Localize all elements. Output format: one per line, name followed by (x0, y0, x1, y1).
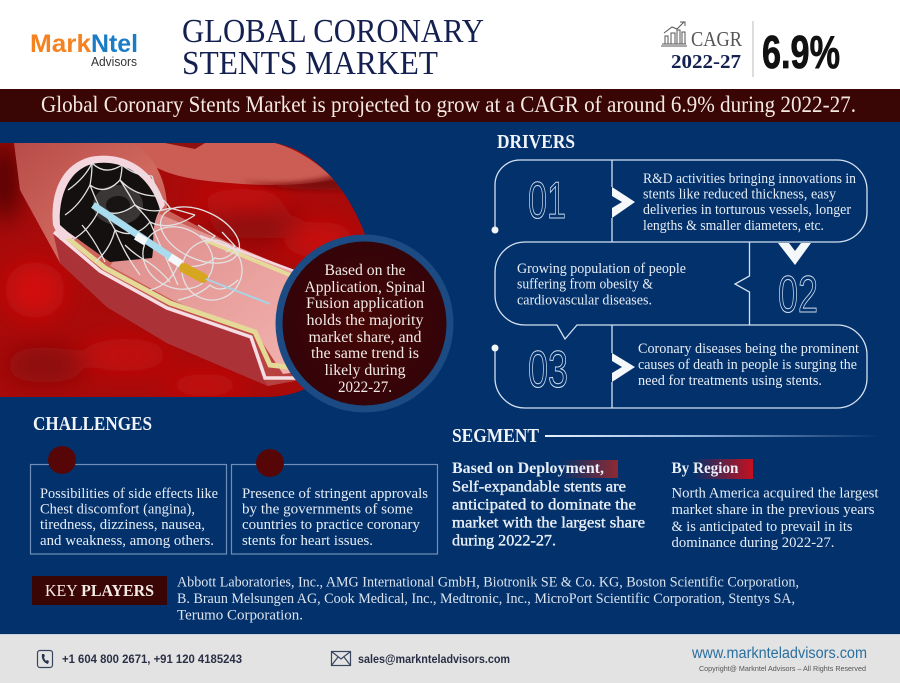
CAGR label: 2022-27 (671, 51, 741, 73)
segment: region: & is anticipated to prevail in its (672, 519, 853, 535)
callout: application share: likely during (324, 362, 406, 379)
driver 02: suffering from obesity & (517, 276, 654, 292)
driver 02: Growing population of people (517, 261, 686, 277)
heading: challenges: CHALLENGES (33, 414, 152, 435)
key players list: Abbott Laboratories, Inc., AMG International GmbH, Biotronik SE & Co. KG, Boston Scientific Corporation, (177, 574, 799, 590)
callout: application share: holds the majority (306, 312, 424, 329)
driver 03: 03 (528, 341, 568, 399)
segment: region: By Region (672, 460, 739, 477)
callout: application share: Based on the (324, 262, 406, 279)
segment: region: market share in the previous years (672, 502, 875, 518)
panel: challenge 1: tiredness, dizziness, nausea, (40, 517, 205, 533)
segment: deployment: during 2022-27. (452, 532, 556, 550)
panel: challenge 1: and weakness, among others. (40, 533, 214, 549)
driver 01 (528, 171, 857, 234)
key players badge: KEY PLAYERS (45, 581, 154, 600)
phone numbers: +1 604 800 2671, +91 120 4185243 (62, 654, 242, 666)
logo: Mark (30, 30, 91, 58)
icon: phone (38, 650, 52, 668)
driver 01: stents like reduced thickness, easy (643, 186, 837, 202)
website: www.marknteladvisors.com (691, 645, 867, 662)
callout: application share: 2022-27. (338, 379, 392, 396)
driver 03 (528, 341, 859, 399)
CAGR label: CAGR (691, 27, 742, 51)
panel: drivers (492, 160, 867, 408)
upper artery (127, 143, 335, 185)
panel: challenge 2: by the governments of some (242, 502, 413, 518)
segment: region (672, 459, 878, 551)
segment: deployment: Self-expandable stents are (452, 478, 626, 496)
title: STENTS MARKET (182, 45, 438, 82)
driver 03: need for treatments using stents. (638, 373, 822, 389)
driver 01: deliveries in torturous vessels, longer (643, 202, 851, 218)
key players list: B. Braun Melsungen AG, Cook Medical, Inc., Medtronic, Inc., MicroPort Scientific Corporation, Stentys SA, (177, 591, 795, 607)
delivery catheter (93, 205, 270, 304)
key players list (177, 574, 799, 624)
panel: challenge 1: Possibilities of side effects like (40, 486, 218, 502)
callout: application share: Application, Spinal (304, 279, 426, 296)
driver 01: R&D activities bringing innovations in (643, 171, 857, 187)
icon: growth chart (661, 22, 687, 46)
callout: application share: Fusion application (306, 295, 424, 312)
panel: challenge 2: Presence of stringent approvals (242, 486, 428, 502)
key players badge (32, 576, 167, 605)
callout: application share (276, 234, 454, 412)
dark opening (60, 163, 160, 262)
segment: deployment: market with the largest share (452, 514, 645, 532)
icon: email (332, 652, 350, 666)
driver 02: cardiovascular diseases. (517, 292, 652, 308)
driver 03: Coronary diseases being the prominent (638, 341, 859, 357)
key players list: Terumo Corporation. (177, 608, 303, 624)
illustration: stent inside artery (0, 138, 370, 397)
heading: segment: SEGMENT (452, 426, 539, 447)
artery tube (14, 143, 300, 386)
CAGR label (671, 27, 742, 73)
key players (32, 574, 799, 624)
drivers outline (495, 160, 867, 408)
driver 02 (517, 261, 818, 324)
footer (0, 634, 900, 683)
panel: challenge 1 (30, 446, 226, 554)
segment: region: North America acquired the largest (672, 486, 878, 502)
driver 01: lengths & smaller diameters, etc. (643, 218, 824, 234)
segment: deployment (452, 460, 645, 550)
panel: challenge 2: stents for heart issues. (242, 533, 373, 549)
title (182, 13, 484, 82)
driver 02: 02 (778, 266, 818, 324)
CAGR value: 6.9% (762, 26, 840, 78)
segment: region: dominance during 2022-27. (672, 535, 834, 551)
logo: Ntel (91, 30, 138, 58)
rim (52, 156, 165, 240)
copyright: Copyright@ Markntel Advisors – All Rights Reserved (699, 664, 866, 673)
logo (30, 30, 138, 69)
panel: challenge 2: countries to practice coronary (242, 517, 421, 533)
segment: deployment: anticipated to dominate the (452, 496, 636, 514)
stent mesh (65, 163, 252, 310)
cut wall (53, 232, 268, 386)
driver 03: causes of death in people is surging the (638, 357, 857, 373)
callout: application share: market share, and (308, 329, 422, 346)
heading: drivers: DRIVERS (497, 132, 575, 153)
callout: application share: the same trend is (311, 345, 419, 362)
driver 01: 01 (528, 172, 566, 230)
logo: Advisors (91, 54, 137, 69)
panel: challenge 2 (232, 449, 438, 554)
segment: deployment: Based on Deployment, (452, 460, 604, 477)
header (0, 0, 900, 89)
title: GLOBAL CORONARY (182, 13, 484, 50)
interior lumen (110, 210, 297, 374)
email address: sales@marknteladvisors.com (358, 654, 510, 666)
panel: challenge 1: Chest discomfort (angina), (40, 502, 195, 518)
